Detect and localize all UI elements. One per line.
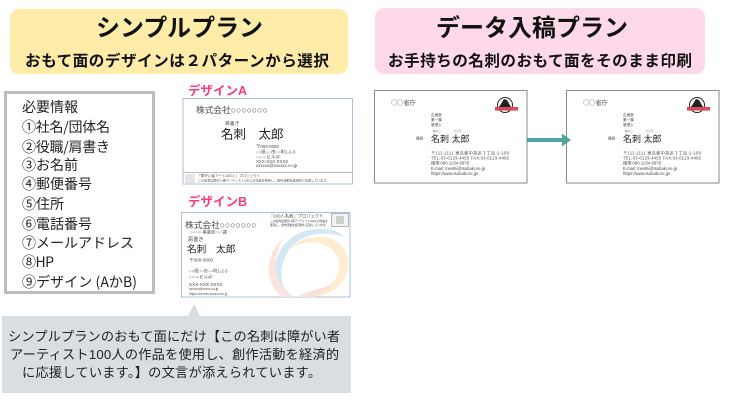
list text: ⑦メールアドレス [22,233,134,253]
list text: ⑧HP [22,252,54,272]
card: original business card: 企画室 [431,112,442,117]
card: printed business card: 〒111-1111 東京都中央区１丁目-1-100 [623,150,702,156]
panel: data submission plan header [375,8,705,74]
card: design B: 使用し、創作活動を経済的に応援しています。 [270,222,328,227]
subheading: simple plan: おもて面のデザインは２パターンから選択 [25,51,329,70]
card: original business card: https://www.tsubaki.ne.jp/ [431,171,479,176]
card: printed business card: 名刺 太郎 [623,133,662,144]
panel: required information list [6,92,154,292]
card: design B: ○○県○○市○○町1-2-3 [189,268,228,274]
label: design A: デザインA [188,83,247,98]
card: design A: 株式会社○○○○○○○ [196,104,267,115]
card: design B: ○○○○ビル4F [189,274,213,280]
card: design B: https://xxxxxx.xxxxxx.co.jp [189,292,228,296]
card: printed business card: ○○省庁 [583,98,608,107]
card: design A: ○○○○ビル4F [256,154,281,160]
card: design B: 『100人名刺』プロジェクト [269,212,323,220]
list text: 必要情報 [22,97,78,117]
card: printed business card: めいし [625,129,633,133]
card: design A: XXX-XXX-XXXX [256,159,288,164]
heading: simple plan: シンプルプラン [96,15,263,42]
decorative swirl [269,229,348,297]
list text: ⑤住所 [22,194,64,214]
card: design B: 肩書き [188,235,204,243]
card: original business card: TEL:03-0123-4455 FAX:03-0123-4466 [431,156,510,160]
card: design B: XXX-XXX-XXXX [189,282,223,287]
card: original business card: ○○省庁 [391,98,416,107]
callout text: アーティスト100人の作品を使用し、創作活動を経済的 [10,346,339,362]
card: design B: xxxxxx@xxxxx.co.jp [189,287,219,291]
card: original business card [374,90,527,183]
card: printed business card: https://www.tsubaki.ne.jp/ [623,171,671,176]
heading: data submission plan: データ入稿プラン [436,14,628,42]
subheading: data submission plan: お手持ちの名刺のおもて面をそのまま印刷 [388,51,692,70]
card: design B: 〒000-0000 [189,258,213,262]
card: original business card: 課長 [416,136,424,140]
card: design A: ○○県○○市○○町1-2-3 [256,148,296,156]
card: design A: 『障がい者アート100人』プロジェクト [197,173,261,178]
panel: simple plan header [10,9,348,74]
card: design B: 名刺 太郎 [187,242,236,256]
list text: ⑨デザイン (AかB) [22,272,137,292]
card: original business card: たろう [454,129,462,133]
list text: ②役職/肩書き [22,137,110,157]
callout text: に応援しています。】の文言が添えられています。 [22,365,321,380]
card: printed business card: 企画室 [623,112,634,117]
card: design A: xxxxxx@xxxxxx.co.jp [256,163,298,168]
card: original business card: 〒111-1111 東京都中央区１丁目-1-100 [431,150,510,156]
list text: ③お名前 [22,155,78,175]
card: original business card: めいし [433,129,441,133]
list text [22,97,137,292]
callout text [8,329,340,380]
card: printed business card: たろう [646,129,654,133]
callout text: シンプルプランのおもて面にだけ【この名刺は障がい者 [8,329,340,344]
card: printed business card: E-mail: meishi@tsubaki.ne.jp [623,166,678,171]
card: design B: この名刺は障がい者アーティスト100人の作品を [270,218,328,223]
card: design B: ○○○○○事業部○○○課 [190,228,228,236]
list text: ⑥電話番号 [22,214,92,234]
card: original business card: 第一課 [431,117,442,122]
card: printed business card: TEL:03-0123-4455 FAX:03-0123-4466 [623,156,702,160]
card: printed business card: 課長 [608,136,616,140]
card: printed business card: 第一課 [623,117,634,122]
card: design A: この名刺は障がい者アーティスト100人の作品を使用し、創作活動を経済的に応援しています。 [198,178,329,182]
label: design B: デザインB [188,194,247,209]
callout: note about simple plan [2,304,351,393]
card: printed business card: 携帯:080-1234-5678 [623,160,662,166]
arrow: original to printed [527,134,571,146]
list text: ①社名/団体名 [22,117,110,137]
card: design B: 株式会社○○○○○○○ [185,219,256,230]
card: design B [182,212,350,297]
card: design A: 〒000-0000 [256,144,280,149]
card: printed business card: 管理士 [623,122,634,127]
card: design A: 肩書き [225,120,240,127]
card: original business card: E-mail: meishi@tsubaki.ne.jp [431,166,486,171]
card: design A [183,98,352,184]
card: original business card: 名刺 太郎 [431,133,470,144]
card: original business card: 管理士 [431,122,442,127]
card: printed business card [566,90,719,183]
list text: ④郵便番号 [22,174,92,194]
card: original business card: 携帯:080-1234-5678 [431,160,470,166]
card: design A: 名刺 太郎 [221,126,284,142]
